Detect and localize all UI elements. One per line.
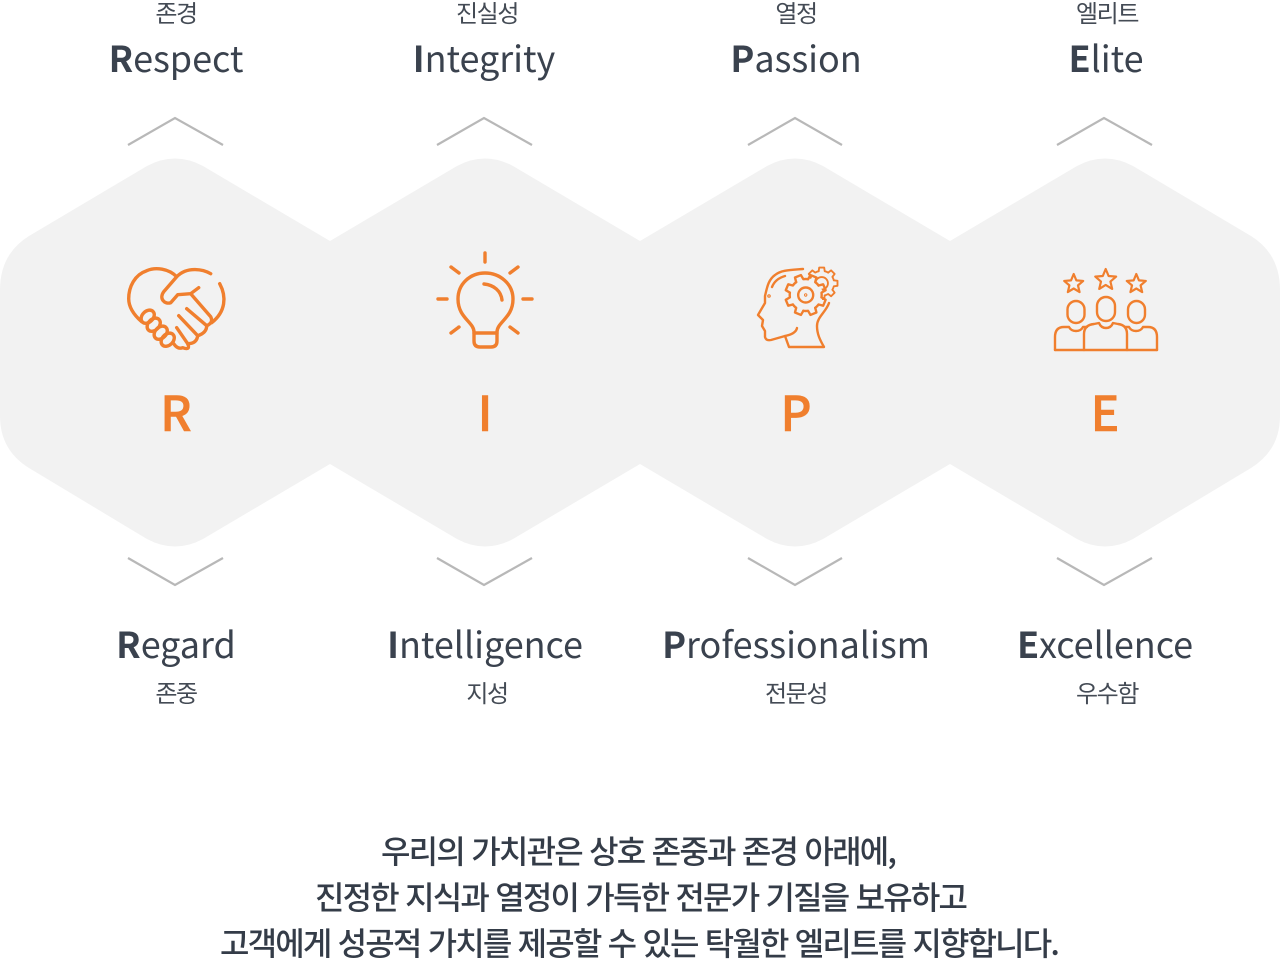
arrow: down chevron R	[128, 558, 223, 585]
arrow: up chevron P	[748, 118, 842, 145]
column heading: Elite	[1068, 0, 1144, 83]
column heading: Respect	[109, 0, 244, 83]
icon: light bulb	[438, 253, 532, 347]
column footer: Intelligence: 지성	[466, 674, 508, 709]
column footer: Professionalism	[662, 617, 930, 709]
column footer: Intelligence: Intelligence	[387, 617, 583, 669]
arrow: up chevron I	[437, 118, 532, 145]
column heading: Passion	[730, 0, 862, 83]
column footer: Excellence: Excellence	[1017, 617, 1193, 669]
column heading: Respect: Respect	[109, 31, 244, 83]
letter E: E	[1091, 375, 1119, 445]
column heading: Elite: Elite	[1068, 31, 1144, 83]
column footer: Regard: Regard	[116, 617, 236, 669]
icon: team with stars	[1055, 269, 1157, 350]
column footer: Regard: 존중	[155, 674, 197, 709]
arrow: up chevron E	[1057, 118, 1152, 145]
column footer: Excellence	[1017, 617, 1193, 709]
column footer: Professionalism: 전문성	[765, 674, 827, 709]
icon: head with gears	[758, 268, 837, 347]
column heading: Integrity: Integrity	[413, 31, 556, 83]
arrow: down chevron P	[748, 558, 842, 585]
column footer: Excellence: 우수함	[1076, 674, 1139, 709]
panel: connected hexagon band	[0, 158, 1280, 546]
column footer: Intelligence	[387, 617, 583, 709]
column footer: Professionalism: Professionalism	[662, 617, 930, 669]
letter R: R	[160, 375, 192, 445]
column footer: Regard	[116, 617, 236, 709]
column heading: Passion: Passion	[730, 31, 862, 83]
letter I: I	[478, 375, 492, 445]
text block: closing statement: 진정한 지식과 열정이 가득한 전문가 기질을 보유하고	[315, 873, 968, 919]
arrow: up chevron R	[128, 118, 223, 145]
text block: closing statement	[220, 827, 1060, 961]
icon: handshake heart	[129, 269, 224, 349]
column heading: Integrity	[413, 0, 556, 83]
letter P: P	[780, 375, 812, 445]
text block: closing statement: 우리의 가치관은 상호 존중과 존경 아래에,	[381, 827, 897, 873]
arrow: down chevron I	[437, 558, 532, 585]
arrow: down chevron E	[1057, 558, 1152, 585]
